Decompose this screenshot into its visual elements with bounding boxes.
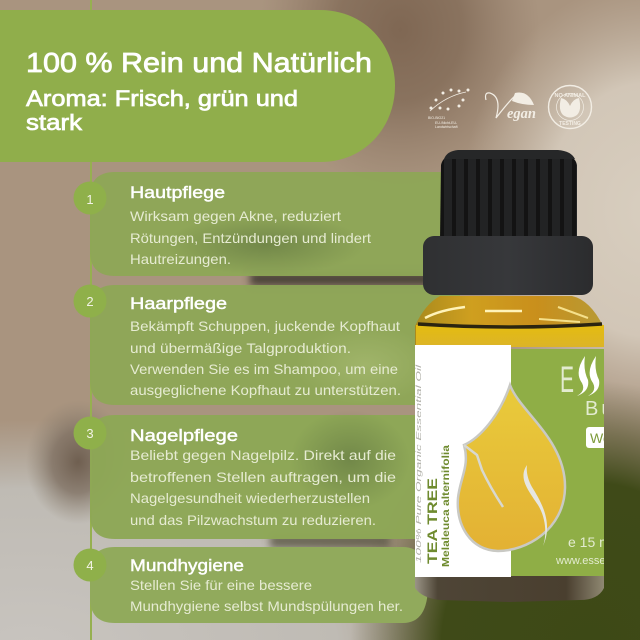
heading: Nagelpflege [130,426,238,445]
brand text (clipped at bottle edge) [555,356,615,567]
label white [415,345,511,577]
step number 1 [74,182,106,214]
body text: Rötungen, Entzündungen und lindert [130,230,371,246]
brand text (clipped at bottle edge): Wo [590,430,611,446]
body text: Hautreizungen. [130,251,231,267]
vertical label text: TEA TREE [424,478,440,564]
body text: Beliebt gegen Nagelpilz. Direkt auf die [130,447,396,463]
bottle body yellow oil [416,325,604,347]
dropper cap ribbed top [440,150,577,240]
subtitle: Aroma: Frisch, grün und [26,86,298,111]
body text [130,577,403,614]
vertical label text: 100% Pure Organic Essential Oil [414,364,423,563]
icon: no animal testing seal: NO ANIMAL [555,93,586,99]
product bottle [414,150,615,602]
step number 3: 3 [86,426,94,441]
icon: no animal testing seal [548,86,592,128]
step number 4 [74,548,106,582]
subtitle: stark [26,110,83,135]
vertical label text [414,364,452,567]
title: 100 % Rein und Natürlich [26,47,372,78]
body text: Mundhygiene selbst Mundspülungen her. [130,598,403,614]
timeline vertical line [90,0,92,640]
vertical label text: Melaleuca alternifolia [440,445,452,567]
label green [511,349,604,576]
step number 1: 1 [86,192,94,207]
panel: Haarpflege [74,284,460,405]
brand text (clipped at bottle edge): E [560,359,574,400]
icon: Vegan logo [486,92,536,122]
body text: Stellen Sie für eine bessere [130,577,312,593]
subtitle [26,86,298,135]
body text: und das Pilzwachstum zu reduzieren. [130,512,376,528]
icon: EU organic leaf [428,88,470,129]
step number 2 [74,284,106,318]
icon: EU organic leaf: Landwirtschaft [435,125,458,129]
bottle base [415,572,604,602]
step number 3 [74,416,106,450]
body text [130,208,371,267]
heading: Haarpflege [130,294,227,313]
icon: oil drop [458,385,565,551]
body text: betroffenen Stellen auftragen, um die [130,469,396,485]
icon: EU organic leaf: EU-/Nicht-EU- [435,121,458,125]
dropper cap collar [423,236,593,295]
body text: Nagelgesundheit wiederherzustellen [130,490,370,506]
body text: Wirksam gegen Akne, reduziert [130,208,341,224]
heading: Hautpflege [130,183,225,202]
icon: Vegan logo: egan [507,106,536,122]
body text: Verwenden Sie es im Shampoo, um eine [130,361,398,377]
icon: EU organic leaf: BIO-BIO21 [428,116,445,120]
body text: ausgeglichene Kopfhaut zu unterstützen. [130,382,401,398]
body text [130,447,396,528]
body text: Bekämpft Schuppen, juckende Kopfhaut [130,318,400,334]
header panel [0,10,395,162]
body text: und übermäßige Talgproduktion. [130,340,351,356]
step number 4: 4 [86,558,94,573]
bottle shoulder glass [415,296,603,345]
panel: Nagelpflege [74,410,440,539]
icon: no animal testing seal: TESTING [559,121,581,127]
heading: Mundhygiene [130,556,244,575]
brand text (clipped at bottle edge): www.esse [555,555,606,567]
panel: Hautpflege [74,172,460,276]
body text [130,318,401,398]
brand text (clipped at bottle edge): Bu [585,398,615,420]
panel: Mundhygiene [74,547,428,623]
step number 2: 2 [86,294,94,309]
certification badges [428,86,592,129]
brand text (clipped at bottle edge): e 15 m [568,534,611,550]
